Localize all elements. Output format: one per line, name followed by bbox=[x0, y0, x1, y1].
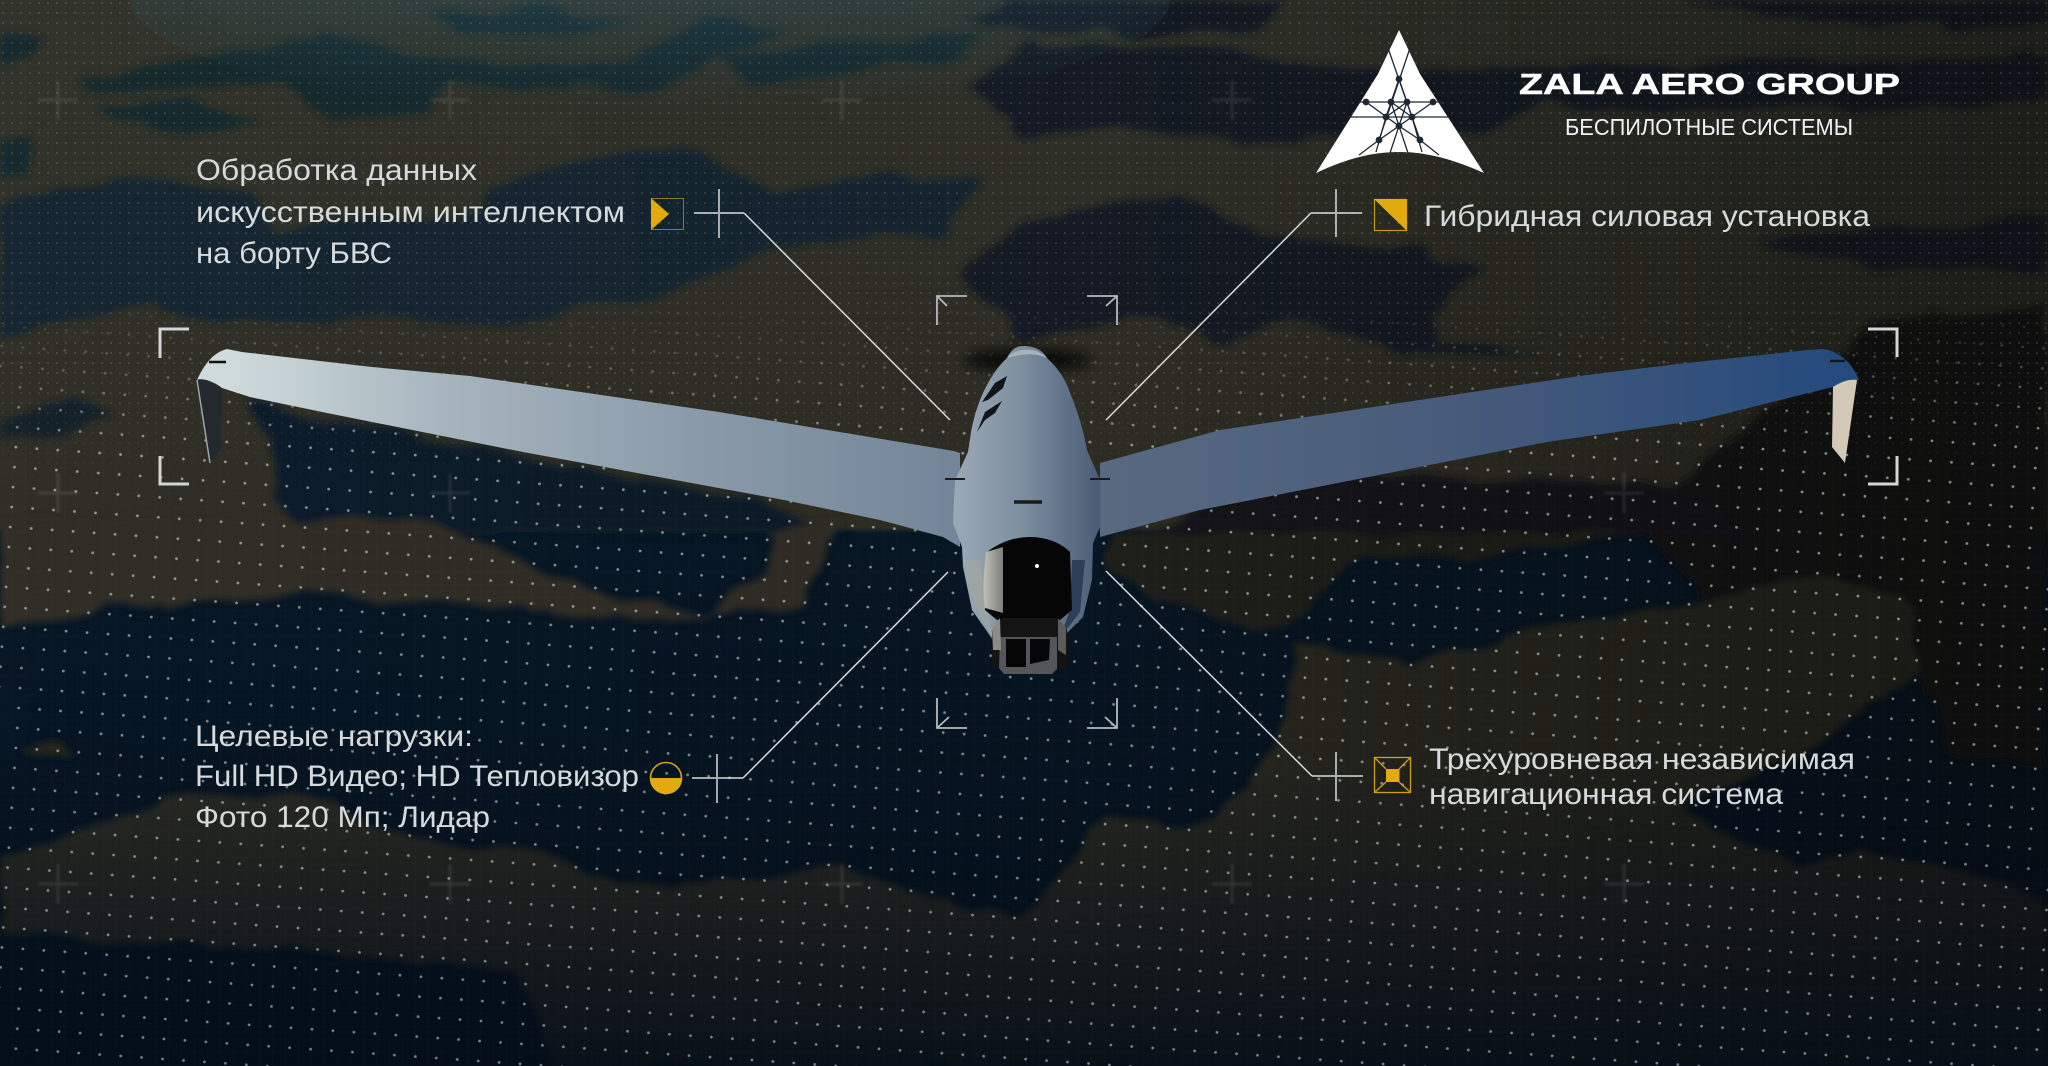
logo bbox=[1316, 30, 1900, 173]
text block: payloads: Фото 120 Мп; Лидар bbox=[195, 801, 490, 834]
icon: triangle emblem bbox=[1316, 30, 1484, 173]
fuselage bbox=[945, 346, 1110, 674]
text block: AI data processing: на борту БВС bbox=[196, 237, 392, 270]
callout: hybrid power plant bbox=[1106, 189, 1870, 420]
text block: navigation: Трехуровневая независимая bbox=[1429, 743, 1855, 776]
text block: AI data processing: искусственным интеллектом bbox=[196, 196, 625, 229]
crosshair and leader line bbox=[692, 572, 948, 803]
text block: hybrid power plant: Гибридная силовая установка bbox=[1424, 200, 1870, 233]
propeller blur bbox=[962, 350, 1092, 370]
right wing bbox=[1100, 349, 1859, 537]
icon: square with center bbox=[1374, 758, 1410, 792]
callout: AI data processing bbox=[196, 154, 950, 420]
text block: AI data processing: Обработка данных bbox=[196, 154, 477, 187]
text block: AI data processing bbox=[196, 154, 625, 270]
crosshair and leader line bbox=[694, 189, 950, 420]
frame brackets: wings bbox=[160, 329, 1897, 484]
icon: diagonal square bbox=[1374, 199, 1407, 231]
gimbal bbox=[992, 618, 1067, 674]
brand name: ZALA AERO GROUP bbox=[1519, 69, 1900, 101]
crosshair and leader line bbox=[1106, 189, 1362, 420]
icon: triangle in square bbox=[651, 198, 684, 230]
text block: payloads bbox=[195, 720, 639, 834]
callout: payloads bbox=[195, 572, 948, 834]
drone bbox=[197, 346, 1859, 674]
callout: navigation bbox=[1106, 571, 1855, 811]
text block: payloads: Full HD Видео; HD Тепловизор bbox=[195, 760, 639, 793]
text block: navigation bbox=[1429, 743, 1855, 811]
brand subtitle: БЕСПИЛОТНЫЕ СИСТЕМЫ bbox=[1565, 114, 1853, 140]
text block: payloads: Целевые нагрузки: bbox=[195, 720, 473, 753]
icon: half circle bbox=[650, 762, 682, 794]
text block: navigation: навигационная система bbox=[1429, 778, 1783, 811]
left wing bbox=[197, 349, 960, 547]
frame brackets: fuselage bbox=[937, 296, 1117, 728]
camera bay bbox=[985, 537, 1072, 620]
crosshair and leader line bbox=[1106, 571, 1363, 801]
